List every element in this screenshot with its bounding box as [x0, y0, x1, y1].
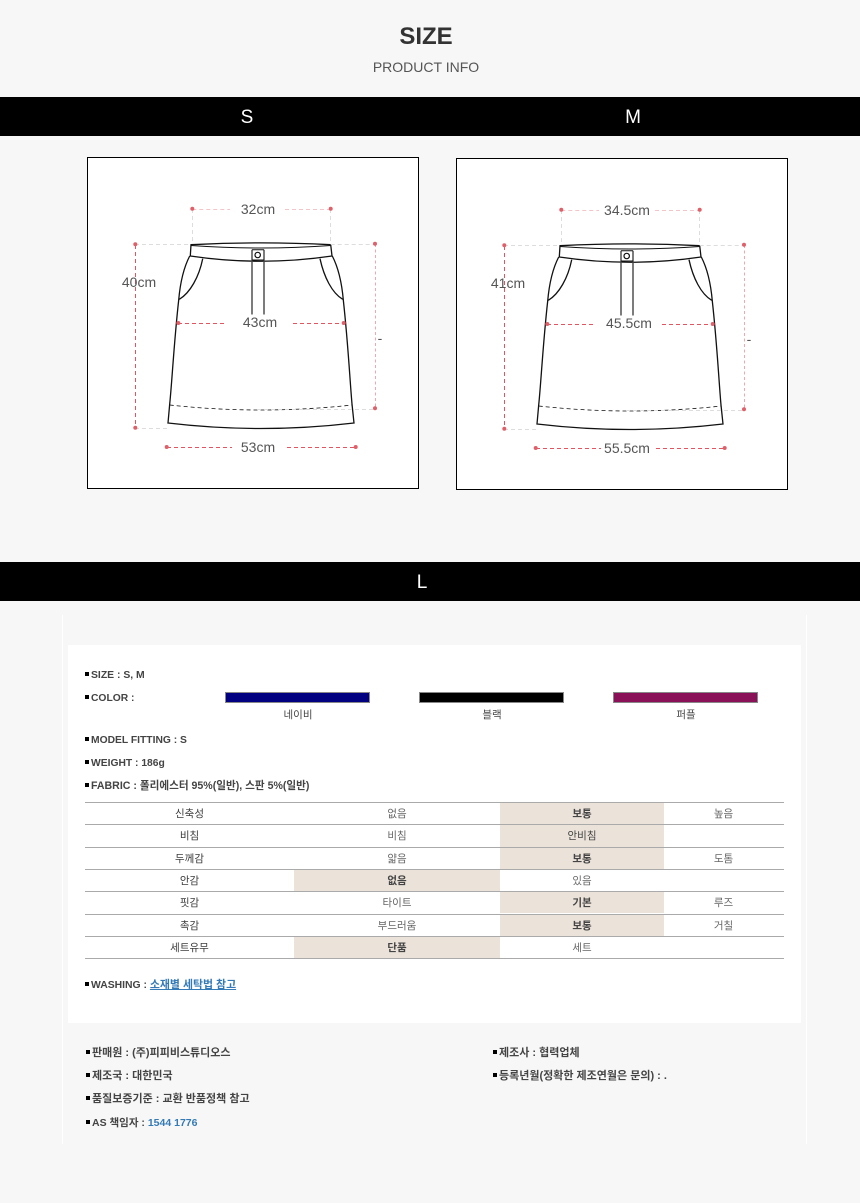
- measurement labels M: 45.5cm: [606, 315, 652, 331]
- registration date: 등록년월(정확한 제조연월은 문의) : .: [499, 1070, 667, 1082]
- row: lining: 안감: [180, 875, 199, 887]
- seller: 판매원 : (주)피피비스튜디오스: [92, 1047, 231, 1059]
- measurement labels M: [491, 202, 752, 456]
- measurement labels S: 43cm: [243, 314, 277, 330]
- skirt outline S: [168, 243, 354, 428]
- subtitle: PRODUCT INFO: [373, 59, 479, 75]
- row: stretch: 신축성: [175, 808, 204, 820]
- row: lining: 있음: [572, 875, 592, 887]
- swatch: black: [419, 692, 564, 703]
- row: sheerness: 비침: [387, 830, 407, 842]
- row: sheerness: 비침: [180, 830, 199, 842]
- measurement labels S: 40cm: [122, 274, 156, 290]
- measurement labels S: -: [378, 330, 383, 346]
- row: stretch: [85, 802, 784, 824]
- right side stripe: [806, 615, 807, 1144]
- row: texture: 부드러움: [378, 920, 416, 932]
- row: stretch: 없음: [387, 808, 407, 820]
- row: stretch: 높음: [714, 808, 733, 820]
- measurement labels S: 32cm: [241, 201, 275, 217]
- size header bar: L: L: [417, 572, 427, 593]
- spec: fabric: FABRIC : 폴리에스터 95%(일반), 스판 5%(일반): [91, 780, 309, 792]
- country of manufacture: 제조국 : 대한민국: [92, 1070, 173, 1082]
- measurement guides S: [135, 209, 376, 448]
- measurement dots M: [502, 208, 746, 450]
- size header bar: S and M: S: [241, 107, 253, 128]
- row: set: 단품: [387, 942, 407, 954]
- spec: weight: WEIGHT : 186g: [91, 758, 165, 769]
- spec: size: SIZE : S, M: [91, 670, 145, 681]
- row: sheerness: [85, 824, 784, 847]
- row: lining: 없음: [387, 875, 407, 887]
- swatch label: black: 블랙: [482, 709, 502, 721]
- measurement labels M: 34.5cm: [604, 202, 650, 218]
- row: stretch: 보통: [572, 808, 592, 820]
- measurement labels M: -: [747, 331, 752, 347]
- row: thickness: 얇음: [387, 853, 407, 865]
- row: set: 세트: [572, 942, 592, 954]
- swatch: purple: [613, 692, 758, 703]
- measurement labels M: 55.5cm: [604, 440, 650, 456]
- panel: product info: [68, 645, 801, 1023]
- row: fit: [85, 891, 784, 913]
- swatch label: navy: 네이비: [284, 709, 312, 721]
- left side stripe: [62, 615, 63, 1144]
- panel: size S skirt diagram: [87, 157, 419, 489]
- row: texture: 보통: [572, 920, 592, 932]
- row: thickness: [85, 847, 784, 869]
- row: fit: 기본: [572, 897, 592, 909]
- washing note: WASHING : 소재별 세탁법 참고: [91, 979, 236, 991]
- panel: size M skirt diagram: [456, 158, 788, 490]
- row: set: 세트유무: [170, 942, 209, 954]
- row: thickness: 두께감: [175, 853, 204, 865]
- row: thickness: 도톰: [714, 853, 733, 865]
- row: lining: [85, 869, 784, 891]
- measurement labels S: [122, 201, 383, 455]
- swatch label: purple: 퍼플: [676, 709, 696, 721]
- attribute table: [85, 802, 784, 959]
- after-service contact: AS 책임자 : 1544 1776: [92, 1117, 197, 1129]
- row: fit: 핏감: [180, 897, 199, 909]
- measurement guides M: [504, 210, 744, 448]
- measurement labels S: 53cm: [241, 439, 275, 455]
- row: set: [85, 936, 784, 959]
- size header bar: L: [0, 562, 860, 601]
- spec: color: COLOR :: [91, 693, 134, 704]
- row: fit: 타이트: [382, 897, 411, 909]
- manufacturer: 제조사 : 협력업체: [499, 1047, 580, 1059]
- row: thickness: 보통: [572, 853, 592, 865]
- skirt outline M: [537, 244, 723, 430]
- size header bar: S and M: [0, 97, 860, 136]
- spec: model fitting: MODEL FITTING : S: [91, 735, 187, 746]
- swatch: navy: [225, 692, 370, 703]
- row: texture: 촉감: [180, 920, 199, 932]
- measurement labels M: 41cm: [491, 275, 525, 291]
- size header bar: S and M: M: [625, 107, 641, 128]
- row: sheerness: 안비침: [568, 830, 596, 842]
- row: texture: [85, 914, 784, 936]
- row: texture: 거칠: [714, 920, 733, 932]
- measurement dots S: [133, 207, 377, 449]
- quality standard: 품질보증기준 : 교환 반품정책 참고: [92, 1093, 250, 1105]
- row: fit: 루즈: [714, 897, 733, 909]
- title: SIZE: [399, 23, 453, 50]
